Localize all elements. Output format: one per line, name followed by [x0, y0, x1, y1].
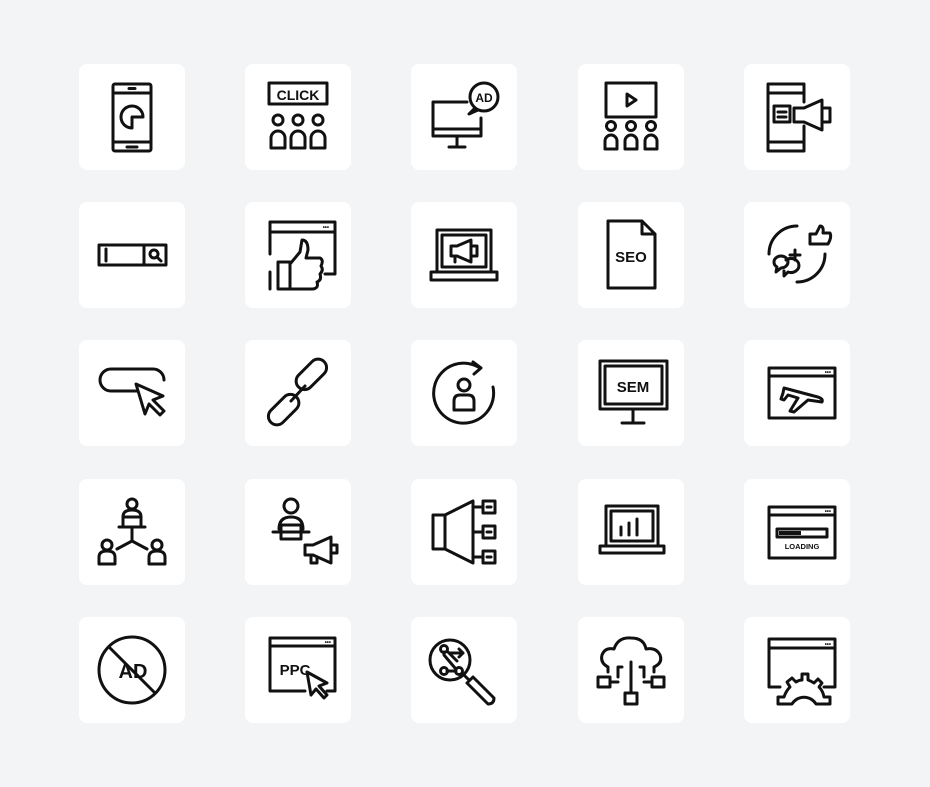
- tile: no ad: [79, 617, 185, 723]
- tile: person laptop megaphone: [245, 479, 351, 585]
- tile: magnifier share: [411, 617, 517, 723]
- tile: no ad: AD: [119, 661, 147, 683]
- tile: video audience: [578, 64, 684, 170]
- tile: SEO document: SEO: [615, 249, 647, 266]
- tile: laptop bar chart: [578, 479, 684, 585]
- tile: user refresh: [411, 340, 517, 446]
- tile: PPC browser: [245, 617, 351, 723]
- tile: search bar: [79, 202, 185, 308]
- tile: browser loading: •••: [825, 509, 831, 515]
- tile: click audience: CLICK: [277, 87, 319, 103]
- tile: SEM monitor: SEM: [617, 379, 649, 396]
- tile: browser gear: [744, 617, 850, 723]
- tile: chain link: [245, 340, 351, 446]
- tile: button cursor: [79, 340, 185, 446]
- tile: browser plane: [744, 340, 850, 446]
- tile: speaker list: [411, 479, 517, 585]
- tile: PPC browser: PPC: [280, 662, 311, 679]
- tile: laptop megaphone: [411, 202, 517, 308]
- tile: SEO document: [578, 202, 684, 308]
- tile: browser gear: •••: [825, 642, 831, 648]
- tile: click audience: [245, 64, 351, 170]
- tile: social circle: [744, 202, 850, 308]
- tile: PPC browser: •••: [325, 640, 331, 646]
- tile: browser thumbs up: •••: [323, 225, 329, 231]
- icon grid: [79, 64, 850, 723]
- tile: team network: [79, 479, 185, 585]
- tile: browser plane: •••: [825, 370, 831, 376]
- tile: browser loading: [744, 479, 850, 585]
- tile: browser loading: LOADING: [785, 542, 819, 551]
- tile: mobile analytics: [79, 64, 185, 170]
- tile: cloud network: [578, 617, 684, 723]
- tile: mobile megaphone: [744, 64, 850, 170]
- tile: SEM monitor: [578, 340, 684, 446]
- tile: monitor ad: [411, 64, 517, 170]
- tile: browser thumbs up: [245, 202, 351, 308]
- tile: monitor ad: AD: [475, 91, 493, 105]
